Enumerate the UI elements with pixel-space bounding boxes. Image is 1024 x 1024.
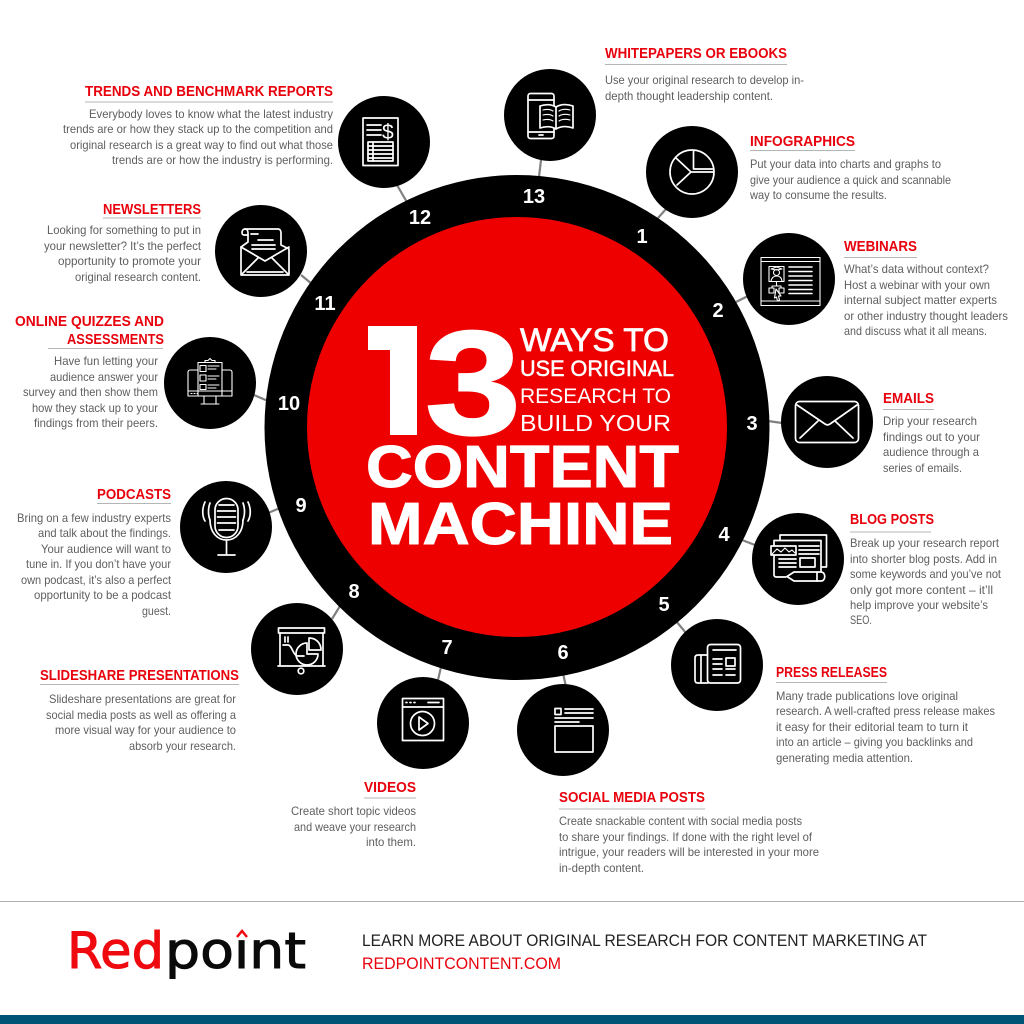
body text: What’s data without context? bbox=[844, 262, 989, 276]
body text: own podcast, it’s also a perfect bbox=[21, 573, 172, 587]
body text: opportunity to be a podcast bbox=[34, 588, 172, 602]
body text: more visual way for your audience to bbox=[55, 723, 236, 737]
panel: slideshare presentations bbox=[40, 668, 239, 753]
body text: depth thought leadership content. bbox=[605, 89, 773, 103]
body text: Have fun letting your bbox=[54, 354, 158, 368]
title small lines: WAYS TO bbox=[520, 322, 669, 358]
body text bbox=[559, 814, 819, 875]
ring numbers: 13 bbox=[523, 186, 545, 208]
icon: blog posts pages and pencil bbox=[752, 513, 844, 605]
heading: ASSESSMENTS bbox=[67, 332, 164, 348]
footer divider bbox=[0, 900, 1024, 902]
body text: trends are or how the industry is performing. bbox=[112, 153, 333, 167]
body text: help improve your website’s bbox=[850, 598, 988, 612]
body text: and weave your research bbox=[294, 820, 416, 834]
body text: it easy for their editorial team to turn it bbox=[776, 720, 969, 734]
body text: and talk about the findings. bbox=[38, 526, 171, 540]
panel: videos bbox=[291, 780, 416, 849]
footer call to action: LEARN MORE ABOUT ORIGINAL RESEARCH FOR CONTENT MARKETING AT bbox=[362, 932, 927, 950]
body text: Create snackable content with social media posts bbox=[559, 814, 802, 828]
icon: newsletters open envelope bbox=[215, 205, 307, 297]
heading: NEWSLETTERS bbox=[103, 202, 201, 218]
body text: SEO. bbox=[850, 613, 872, 627]
heading: PRESS RELEASES bbox=[776, 665, 887, 681]
red centre disc bbox=[307, 217, 727, 637]
ring numbers: 9 bbox=[295, 495, 307, 517]
body text: original research is a great way to find out what those bbox=[70, 138, 333, 152]
body text bbox=[605, 73, 804, 103]
body text: Drip your research bbox=[883, 414, 977, 428]
body text: opportunity to promote your bbox=[58, 254, 201, 268]
body text: only got more content – it’ll bbox=[850, 583, 993, 597]
panel: whitepapers or ebooks bbox=[605, 46, 804, 103]
body text: findings from their peers. bbox=[34, 416, 158, 430]
body text: research. A well-crafted press release makes bbox=[776, 704, 995, 718]
icon: whitepapers phone and book bbox=[504, 69, 596, 161]
footer call to action bbox=[362, 932, 927, 973]
title small lines bbox=[520, 322, 674, 436]
body text bbox=[46, 692, 236, 753]
heading: BLOG POSTS bbox=[850, 512, 934, 528]
panel: social media posts bbox=[559, 790, 819, 875]
panel: podcasts bbox=[17, 487, 172, 618]
ring numbers: 6 bbox=[557, 642, 569, 664]
body text bbox=[63, 107, 333, 167]
body text: survey and then show them bbox=[23, 385, 158, 399]
body text: Your audience will want to bbox=[41, 542, 171, 556]
body text: in-depth content. bbox=[559, 861, 644, 875]
body text: audience answer your bbox=[50, 370, 158, 384]
title bbox=[368, 326, 679, 545]
heading: TRENDS AND BENCHMARK REPORTS bbox=[85, 84, 333, 100]
body text: tune in. If you don’t have your bbox=[26, 557, 171, 571]
body text: trends are or how they stack up to the competition and bbox=[63, 122, 333, 136]
heading: WEBINARS bbox=[844, 239, 917, 255]
body text: generating media attention. bbox=[776, 751, 913, 765]
heading: SLIDESHARE PRESENTATIONS bbox=[40, 668, 239, 684]
icon: trends report document bbox=[338, 96, 430, 188]
body text: absorb your research. bbox=[129, 739, 236, 753]
title small lines: RESEARCH TO bbox=[520, 385, 671, 408]
body text: way to consume the results. bbox=[749, 188, 887, 202]
body text bbox=[749, 157, 951, 202]
icon: podcasts microphone bbox=[180, 481, 272, 573]
connector lines bbox=[254, 160, 782, 687]
logo: Redpoint: poınt bbox=[165, 922, 306, 980]
icon: emails envelope bbox=[781, 376, 873, 468]
big number 13: 3 bbox=[425, 301, 521, 466]
ring numbers: 10 bbox=[278, 393, 300, 415]
heading: ONLINE QUIZZES AND bbox=[15, 314, 164, 330]
ring numbers: 3 bbox=[746, 413, 758, 435]
body text: to share your findings. If done with the right level of bbox=[559, 830, 813, 844]
body text: Break up your research report bbox=[850, 536, 1000, 550]
ring numbers: 7 bbox=[441, 637, 453, 659]
body text: intrigue, your readers will be interested in your more bbox=[559, 845, 819, 859]
logo: Redpoint: Red bbox=[67, 922, 164, 980]
body text: audience through a bbox=[883, 445, 979, 459]
body text: how they stack up to your bbox=[32, 401, 158, 415]
big number 13 bbox=[368, 326, 516, 437]
body text: into an article – giving you backlinks and bbox=[776, 735, 973, 749]
panel: infographics bbox=[749, 134, 951, 202]
title small lines: USE ORIGINAL bbox=[520, 356, 674, 381]
ring numbers: 1 bbox=[636, 226, 648, 248]
heading: PODCASTS bbox=[97, 487, 171, 503]
body text: and discuss what it all means. bbox=[844, 324, 987, 338]
heading: EMAILS bbox=[883, 391, 934, 407]
title small lines: BUILD YOUR bbox=[520, 410, 671, 436]
body text bbox=[44, 223, 202, 284]
body text: Host a webinar with your own bbox=[844, 278, 990, 292]
body text: into them. bbox=[366, 835, 416, 849]
ring numbers: 11 bbox=[314, 293, 336, 315]
footer call to action: REDPOINTCONTENT.COM bbox=[362, 955, 561, 973]
body text: or other industry thought leaders bbox=[844, 309, 1008, 323]
icon: webinars screen bbox=[743, 233, 835, 325]
body text: findings out to your bbox=[883, 430, 980, 444]
body text: original research content. bbox=[75, 270, 201, 284]
icon: slideshare presentation board bbox=[251, 603, 343, 695]
body text bbox=[850, 536, 1002, 627]
bottom bar bbox=[0, 1015, 1024, 1024]
ring numbers bbox=[278, 186, 758, 664]
panel: press releases bbox=[776, 665, 995, 765]
icon: press releases newspaper bbox=[671, 619, 763, 711]
icon: social media post window bbox=[517, 684, 609, 776]
heading bbox=[15, 314, 164, 348]
body text bbox=[23, 354, 158, 430]
panel: blog posts bbox=[850, 512, 1002, 627]
body text bbox=[883, 414, 980, 475]
heading: SOCIAL MEDIA POSTS bbox=[559, 790, 705, 806]
body text: Many trade publications love original bbox=[776, 689, 958, 703]
logo caret bbox=[237, 931, 247, 937]
big number 13: 1 bbox=[358, 298, 443, 468]
title large lines bbox=[366, 434, 679, 557]
body text: Use your original research to develop in- bbox=[605, 73, 804, 87]
central wheel bbox=[264, 175, 770, 680]
ring numbers: 5 bbox=[658, 594, 670, 616]
ring numbers: 2 bbox=[712, 300, 724, 322]
body text bbox=[291, 804, 416, 849]
title large lines: CONTENT bbox=[366, 434, 679, 500]
heading: VIDEOS bbox=[364, 780, 416, 796]
body text: Bring on a few industry experts bbox=[17, 511, 171, 525]
body text: Everybody loves to know what the latest industry bbox=[89, 107, 333, 121]
body text bbox=[17, 511, 172, 618]
panel: webinars bbox=[844, 239, 1008, 338]
icon: quizzes clipboard and monitor bbox=[164, 337, 256, 429]
ring numbers: 12 bbox=[409, 207, 431, 229]
heading: INFOGRAPHICS bbox=[750, 134, 855, 150]
black ring bbox=[264, 175, 770, 680]
body text: guest. bbox=[142, 604, 171, 618]
heading: WHITEPAPERS OR EBOOKS bbox=[605, 46, 787, 62]
body text: internal subject matter experts bbox=[844, 293, 997, 307]
body text: some keywords and you’ve not bbox=[850, 567, 1002, 581]
panel: emails bbox=[883, 391, 980, 475]
body text bbox=[844, 262, 1008, 338]
body text: social media posts as well as offering a bbox=[46, 708, 236, 722]
body text: Looking for something to put in bbox=[47, 223, 201, 237]
icon: infographics pie chart bbox=[646, 126, 738, 218]
body text: Slideshare presentations are great for bbox=[49, 692, 236, 706]
body text: series of emails. bbox=[883, 461, 962, 475]
title large lines: MACHINE bbox=[368, 491, 673, 557]
body text: your newsletter? It’s the perfect bbox=[44, 239, 202, 253]
body text: Create short topic videos bbox=[291, 804, 416, 818]
icon: videos player window bbox=[377, 677, 469, 769]
body text: Put your data into charts and graphs to bbox=[750, 157, 941, 171]
ring numbers: 8 bbox=[348, 581, 360, 603]
body text: into shorter blog posts. Add in bbox=[850, 552, 997, 566]
body text bbox=[776, 689, 995, 765]
panel: online quizzes and assessments bbox=[15, 314, 164, 430]
logo: Redpoint bbox=[67, 922, 306, 980]
panel: trends and benchmark reports bbox=[63, 84, 333, 167]
dollar sign: $ bbox=[382, 121, 394, 144]
ring numbers: 4 bbox=[718, 524, 730, 546]
body text: give your audience a quick and scannable bbox=[750, 173, 951, 187]
panel: newsletters bbox=[44, 202, 202, 284]
